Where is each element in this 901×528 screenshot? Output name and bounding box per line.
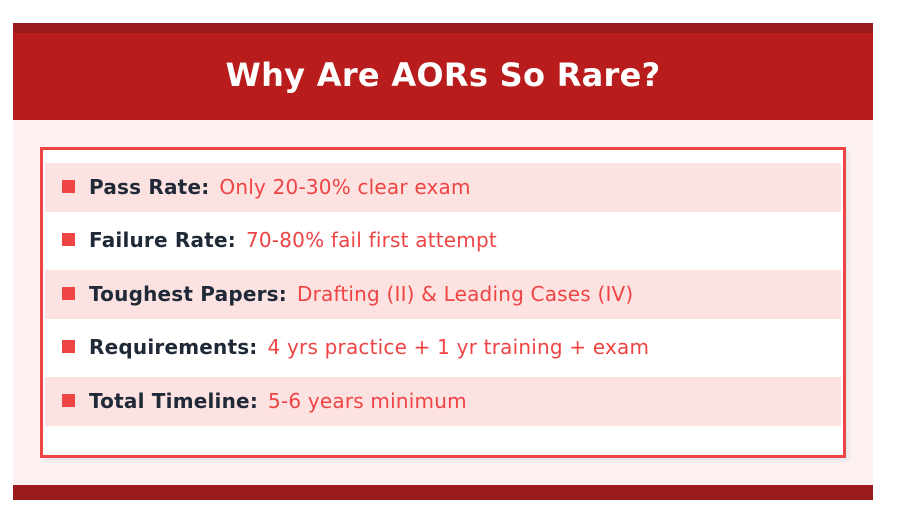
row: pass rate (45, 163, 841, 212)
panel: list (40, 147, 846, 458)
row: total timeline: 5-6 years minimum (268, 388, 467, 412)
row: toughest papers: Toughest Papers: (89, 282, 287, 306)
row: failure rate: Failure Rate: (89, 228, 236, 252)
row: requirements: 4 yrs practice + 1 yr training + exam (268, 334, 649, 358)
title: Why Are AORs So Rare? (225, 56, 661, 94)
row: toughest papers (45, 270, 841, 319)
row: failure rate (62, 228, 497, 252)
header band (13, 23, 873, 120)
row: total timeline: Total Timeline: (89, 388, 258, 412)
footer band (13, 485, 873, 500)
row: toughest papers: Drafting (II) & Leading Cases (IV) (297, 282, 633, 306)
row: requirements: Requirements: (89, 334, 258, 358)
row: total timeline (45, 377, 841, 426)
row: requirements (62, 334, 649, 358)
row: pass rate: Only 20-30% clear exam (219, 174, 471, 198)
row: failure rate: 70-80% fail first attempt (246, 228, 497, 252)
row: pass rate: Pass Rate: (89, 174, 209, 198)
